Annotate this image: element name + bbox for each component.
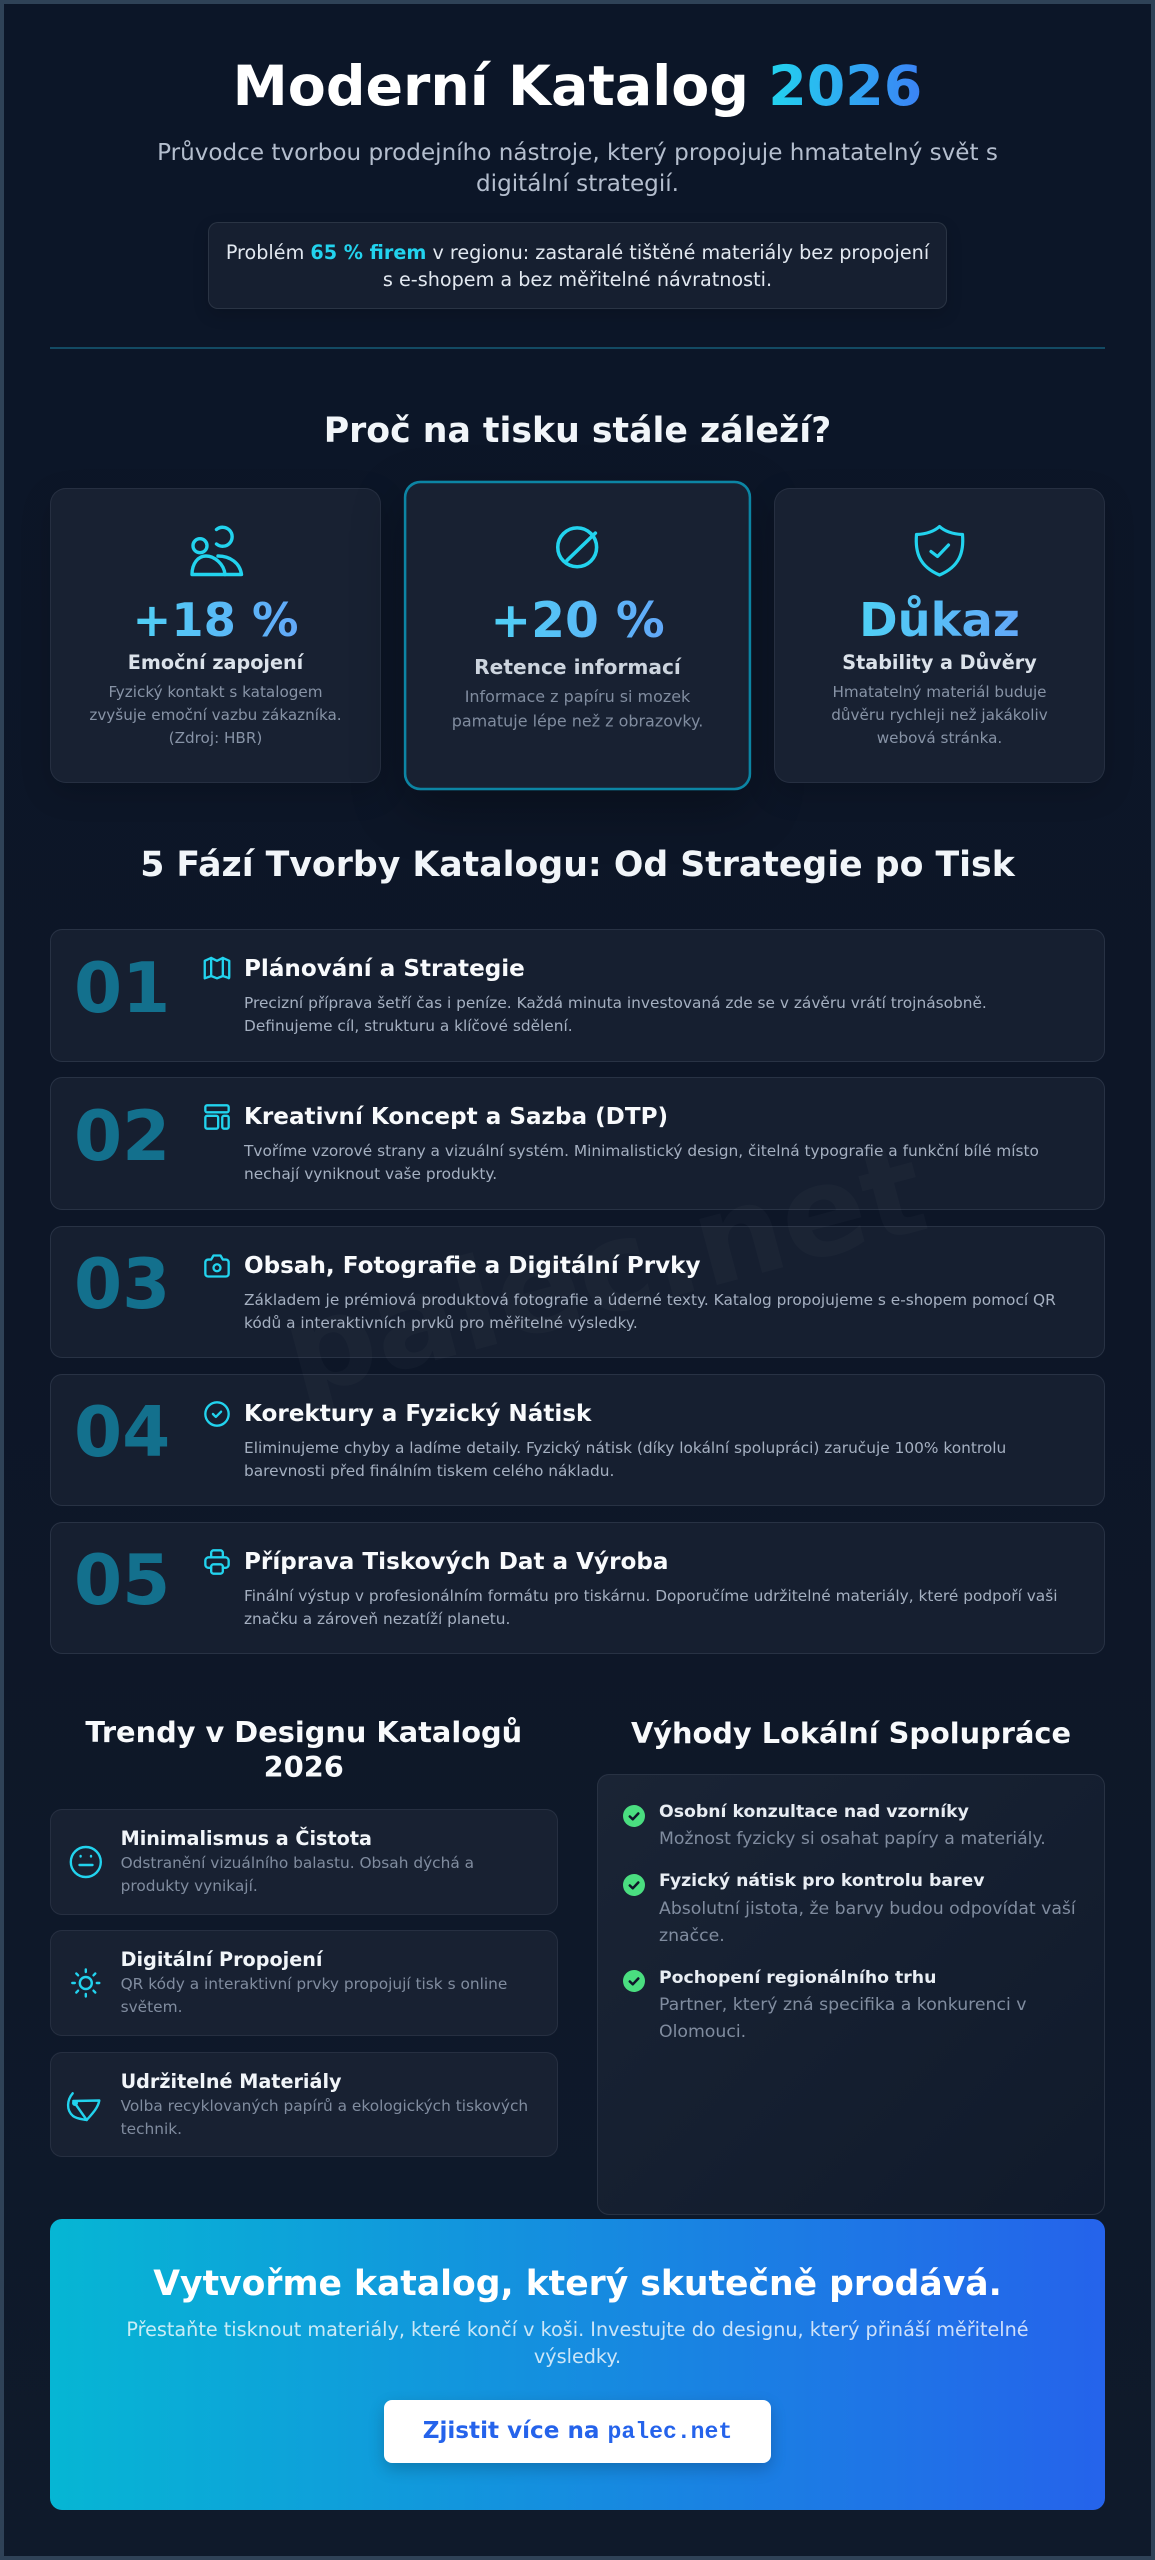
cta text	[50, 2316, 1105, 2370]
trend: minimalism	[50, 1809, 558, 1915]
step title: Obsah, Fotografie a Digitální Prvky	[244, 1253, 701, 1279]
value: +18 %	[132, 593, 299, 647]
icon: camera	[204, 1254, 230, 1278]
description	[452, 687, 703, 731]
value: +20 %	[490, 592, 665, 649]
step 02	[50, 1077, 1105, 1210]
panel: stat cards	[50, 480, 1105, 798]
panel: trends	[50, 1809, 558, 2157]
description: webová stránka.	[877, 729, 1002, 747]
icon: circle slash	[556, 526, 598, 568]
panel: call to action	[50, 2219, 1105, 2510]
callout text	[226, 241, 930, 291]
icon: check	[623, 1805, 645, 1827]
benefit text: značce.	[659, 1926, 725, 1946]
number: 04	[74, 1393, 170, 1473]
trend title: Digitální Propojení	[121, 1948, 322, 1971]
trend description: Volba recyklovaných papírů a ekologických tiskových	[121, 2097, 528, 2115]
benefit text	[659, 1992, 1026, 2046]
description: Fyzický kontakt s katalogem	[108, 683, 323, 701]
benefit 3	[623, 1968, 1026, 2042]
heading: why print matters: Proč na tisku stále záleží?	[324, 410, 831, 450]
benefit text: Olomouci.	[659, 2022, 746, 2042]
description: pamatuje lépe než z obrazovky.	[452, 712, 703, 731]
callout text: s e-shopem a bez měřitelné návratnosti.	[383, 268, 772, 291]
icon: map	[204, 956, 230, 980]
description: zvyšuje emoční vazbu zákazníka.	[89, 706, 342, 724]
number: 02	[74, 1097, 170, 1177]
icon: layout	[204, 1104, 230, 1130]
benefit text: Absolutní jistota, že barvy budou odpovídat vaší	[659, 1899, 1076, 1919]
description: (Zdroj: HBR)	[169, 729, 262, 747]
heading: local cooperation: Výhody Lokální Spolupráce	[631, 1716, 1071, 1750]
header	[50, 55, 1105, 349]
step title: Kreativní Koncept a Sazba (DTP)	[244, 1104, 668, 1130]
step description	[244, 1439, 1006, 1480]
label: Retence informací	[474, 655, 681, 679]
cta button	[384, 2400, 771, 2463]
icon: leaf	[66, 2092, 100, 2122]
cta button: Zjistit více na palec.net	[423, 2418, 732, 2445]
step description: Finální výstup v profesionálním formátu pro tiskárnu. Doporučíme udržitelné materiály, které podpoří vaši	[244, 1587, 1058, 1605]
icon: printer	[204, 1549, 230, 1575]
benefit text: Možnost fyzicky si osahat papíry a materiály.	[659, 1829, 1046, 1849]
trend description	[120, 2097, 528, 2138]
value: Důkaz	[859, 593, 1020, 647]
icon: check	[623, 1970, 645, 1992]
step title: Plánování a Strategie	[244, 956, 525, 982]
step description: Tvoříme vzorové strany a vizuální systém. Minimalistický design, čitelná typografie a funkční bílé místo	[244, 1142, 1039, 1160]
watermark: palec.net	[268, 1116, 940, 1426]
step description	[244, 1291, 1056, 1332]
description	[831, 683, 1048, 747]
benefit 1	[623, 1802, 1046, 1849]
step description: Definujeme cíl, strukturu a klíčové sdělení.	[244, 1017, 573, 1035]
problem callout	[208, 222, 947, 309]
trend description: produkty vynikají.	[121, 1877, 258, 1895]
icon: neutral face	[70, 1846, 102, 1878]
trend title: Udržitelné Materiály	[121, 2070, 342, 2093]
stat card: proof	[774, 488, 1105, 783]
step 05	[50, 1522, 1105, 1654]
heading: five phases: 5 Fází Tvorby Katalogu: Od Strategie po Tisk	[140, 844, 1015, 884]
number: 01	[74, 949, 170, 1029]
step description	[244, 994, 987, 1035]
step description: Eliminujeme chyby a ladíme detaily. Fyzický nátisk (díky lokální spolupráci) zaručuje 100% kontrolu	[244, 1439, 1006, 1457]
label: Emoční zapojení	[128, 651, 303, 674]
step description: značku a zároveň nezatíží planetu.	[244, 1610, 510, 1628]
icon: check circle	[204, 1401, 230, 1427]
step description: Základem je prémiová produktová fotografie a úderné texty. Katalog propojujeme s e-shopem pomocí QR	[244, 1291, 1056, 1309]
stat card: emotional engagement	[50, 488, 381, 783]
trend description: technik.	[121, 2120, 182, 2138]
benefit text: Partner, který zná specifika a konkurenci v	[659, 1995, 1026, 2015]
benefit 2	[623, 1871, 1076, 1946]
icon: check	[623, 1874, 645, 1896]
icon: users	[190, 526, 244, 576]
cta heading: Vytvořme katalog, který skutečně prodává.	[153, 2264, 1002, 2304]
icon: sun	[71, 1968, 100, 1998]
panel: local benefits	[597, 1774, 1105, 2215]
step description	[244, 1587, 1058, 1628]
description: Hmatatelný materiál buduje	[832, 683, 1047, 701]
step description: barevnosti před finálním tiskem celého nákladu.	[244, 1462, 614, 1480]
trend: digital link	[50, 1930, 558, 2036]
description	[89, 683, 342, 747]
title: Moderní Katalog 2026	[233, 55, 922, 119]
subtitle: digitální strategií.	[476, 171, 679, 197]
step 03	[50, 1226, 1105, 1358]
trend description: Odstranění vizuálního balastu. Obsah dýchá a	[121, 1854, 474, 1872]
trend: sustainable materials	[50, 2052, 558, 2157]
subtitle	[157, 140, 998, 197]
benefit title: Osobní konzultace nad vzorníky	[659, 1802, 969, 1822]
step title: Korektury a Fyzický Nátisk	[244, 1401, 591, 1427]
step 04	[50, 1374, 1105, 1506]
description: důvěru rychleji než jakákoliv	[831, 706, 1048, 724]
step description: nechají vyniknout vaše produkty.	[244, 1165, 497, 1183]
trend title: Minimalismus a Čistota	[121, 1827, 372, 1850]
description: Informace z papíru si mozek	[465, 687, 690, 706]
heading: trends	[85, 1715, 522, 1784]
trend description	[121, 1975, 507, 2016]
number: 05	[74, 1541, 170, 1621]
cta text: Přestaňte tisknout materiály, které končí v koši. Investujte do designu, který přináší měřitelné	[126, 2318, 1029, 2341]
trend description	[121, 1854, 474, 1895]
icon: shield check	[914, 524, 964, 577]
heading: trends: Trendy v Designu Katalogů	[85, 1715, 522, 1749]
step 01	[50, 929, 1105, 1062]
step title: Příprava Tiskových Dat a Výroba	[244, 1549, 668, 1575]
label: Stability a Důvěry	[842, 651, 1037, 674]
step description	[244, 1142, 1039, 1183]
callout text: Problém 65 % firem v regionu: zastaralé tištěné materiály bez propojení	[226, 241, 929, 264]
benefit title: Pochopení regionálního trhu	[659, 1968, 936, 1988]
step description: Precizní příprava šetří čas i peníze. Každá minuta investovaná zde se v závěru vrátí trojnásobně.	[244, 994, 987, 1012]
heading: trends: 2026	[264, 1750, 344, 1784]
number: 03	[74, 1245, 170, 1325]
cta text: výsledky.	[534, 2345, 621, 2368]
stat card: retention (highlighted)	[404, 481, 751, 790]
trend description: QR kódy a interaktivní prvky propojují tisk s online	[121, 1975, 507, 1993]
benefit title: Fyzický nátisk pro kontrolu barev	[659, 1871, 984, 1891]
trend description: světem.	[121, 1998, 182, 2016]
subtitle: Průvodce tvorbou prodejního nástroje, který propojuje hmatatelný svět s	[157, 140, 998, 166]
benefit text	[659, 1899, 1076, 1946]
step description: kódů a interaktivních prvků pro měřitelné výsledky.	[244, 1314, 638, 1332]
panel: steps	[50, 929, 1105, 1654]
